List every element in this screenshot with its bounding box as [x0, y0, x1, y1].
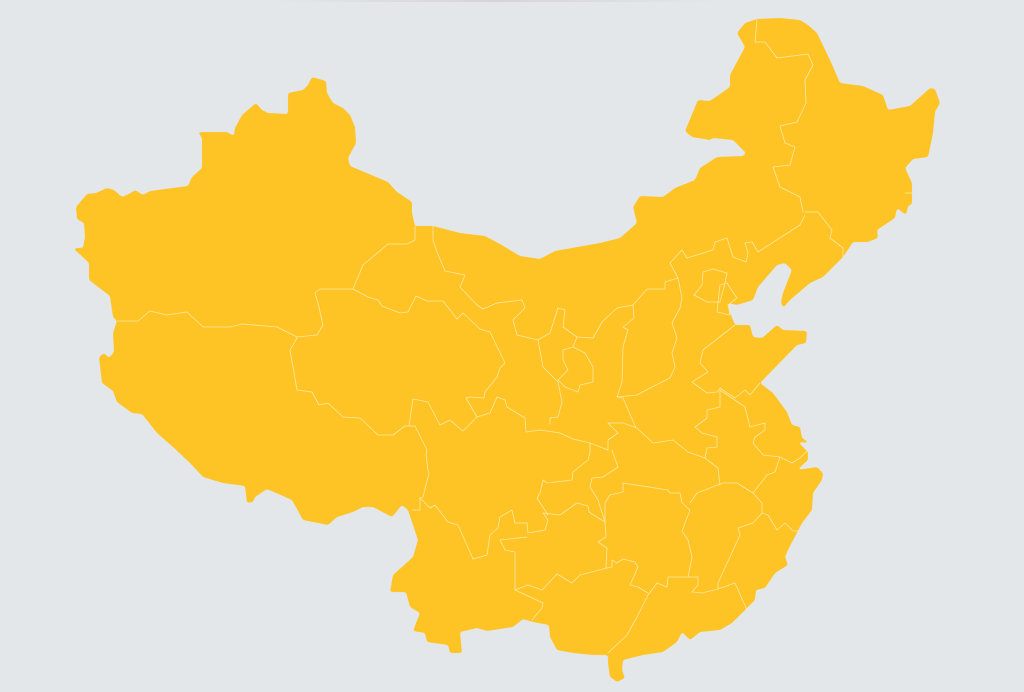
border: Sichuan north: [477, 397, 590, 443]
border: Jiangxi north: [690, 483, 762, 513]
border: Henan west: [617, 397, 636, 428]
border: Shaanxi and Hubei: [590, 423, 618, 450]
border: Shaanxi and Gansu: [558, 337, 577, 380]
border: Shandong: [692, 325, 760, 398]
border: Sichuan and Tibet: [412, 426, 429, 510]
border: Hubei and Anhui: [705, 458, 720, 485]
border: Xinjiang and Tibet: [117, 226, 415, 337]
border: Shaanxi and Inner Mongolia: [433, 226, 633, 340]
border: Chongqing and Hubei: [590, 450, 618, 522]
border: Inner Mongolia and Hebei: [670, 215, 805, 278]
border: Guangdong north: [648, 577, 747, 610]
border: Guizhou north: [528, 503, 605, 533]
border: Jilin and Liaoning: [805, 212, 843, 257]
border: Fujian and Zhejiang: [762, 513, 800, 531]
border: Beijing: [694, 269, 727, 302]
provincial borders: [117, 20, 912, 653]
border: Henan and Hebei: [617, 278, 682, 397]
top edge strip: [270, 0, 720, 2]
border: Chongqing: [537, 443, 590, 515]
border: Gansu and Sichuan: [550, 382, 562, 424]
border: Guangxi and Guangdong: [608, 595, 648, 653]
border: Henan and Anhui: [695, 390, 720, 458]
border: Shaanxi loop: [558, 347, 593, 392]
border: Heilongjiang east notch: [905, 192, 912, 194]
border: Shaanxi and Shanxi: [617, 305, 634, 397]
border: Qinghai and Sichuan: [409, 399, 477, 431]
border: Sichuan and Yunnan: [420, 498, 528, 559]
border: Qinghai and Gansu: [353, 289, 505, 417]
border: Tianjin: [717, 283, 737, 315]
border: Jiangsu and Anhui: [720, 390, 808, 463]
border: Heilongjiang and Inner Mongolia: [755, 20, 813, 212]
border: Guizhou and Hunan: [598, 522, 607, 568]
border: Henan south: [608, 423, 705, 458]
border: Qinghai and Tibet: [290, 338, 415, 435]
border: Guangxi north: [607, 559, 648, 593]
border: Guangxi and Yunnan: [515, 590, 543, 620]
border: Gansu and Ningxia: [538, 340, 558, 382]
border: Fujian and Jiangxi: [718, 513, 762, 589]
border: Guizhou west and south: [500, 537, 607, 590]
border: Zhejiang and Anhui: [753, 457, 780, 493]
border: Hunan and Jiangxi: [605, 483, 692, 577]
